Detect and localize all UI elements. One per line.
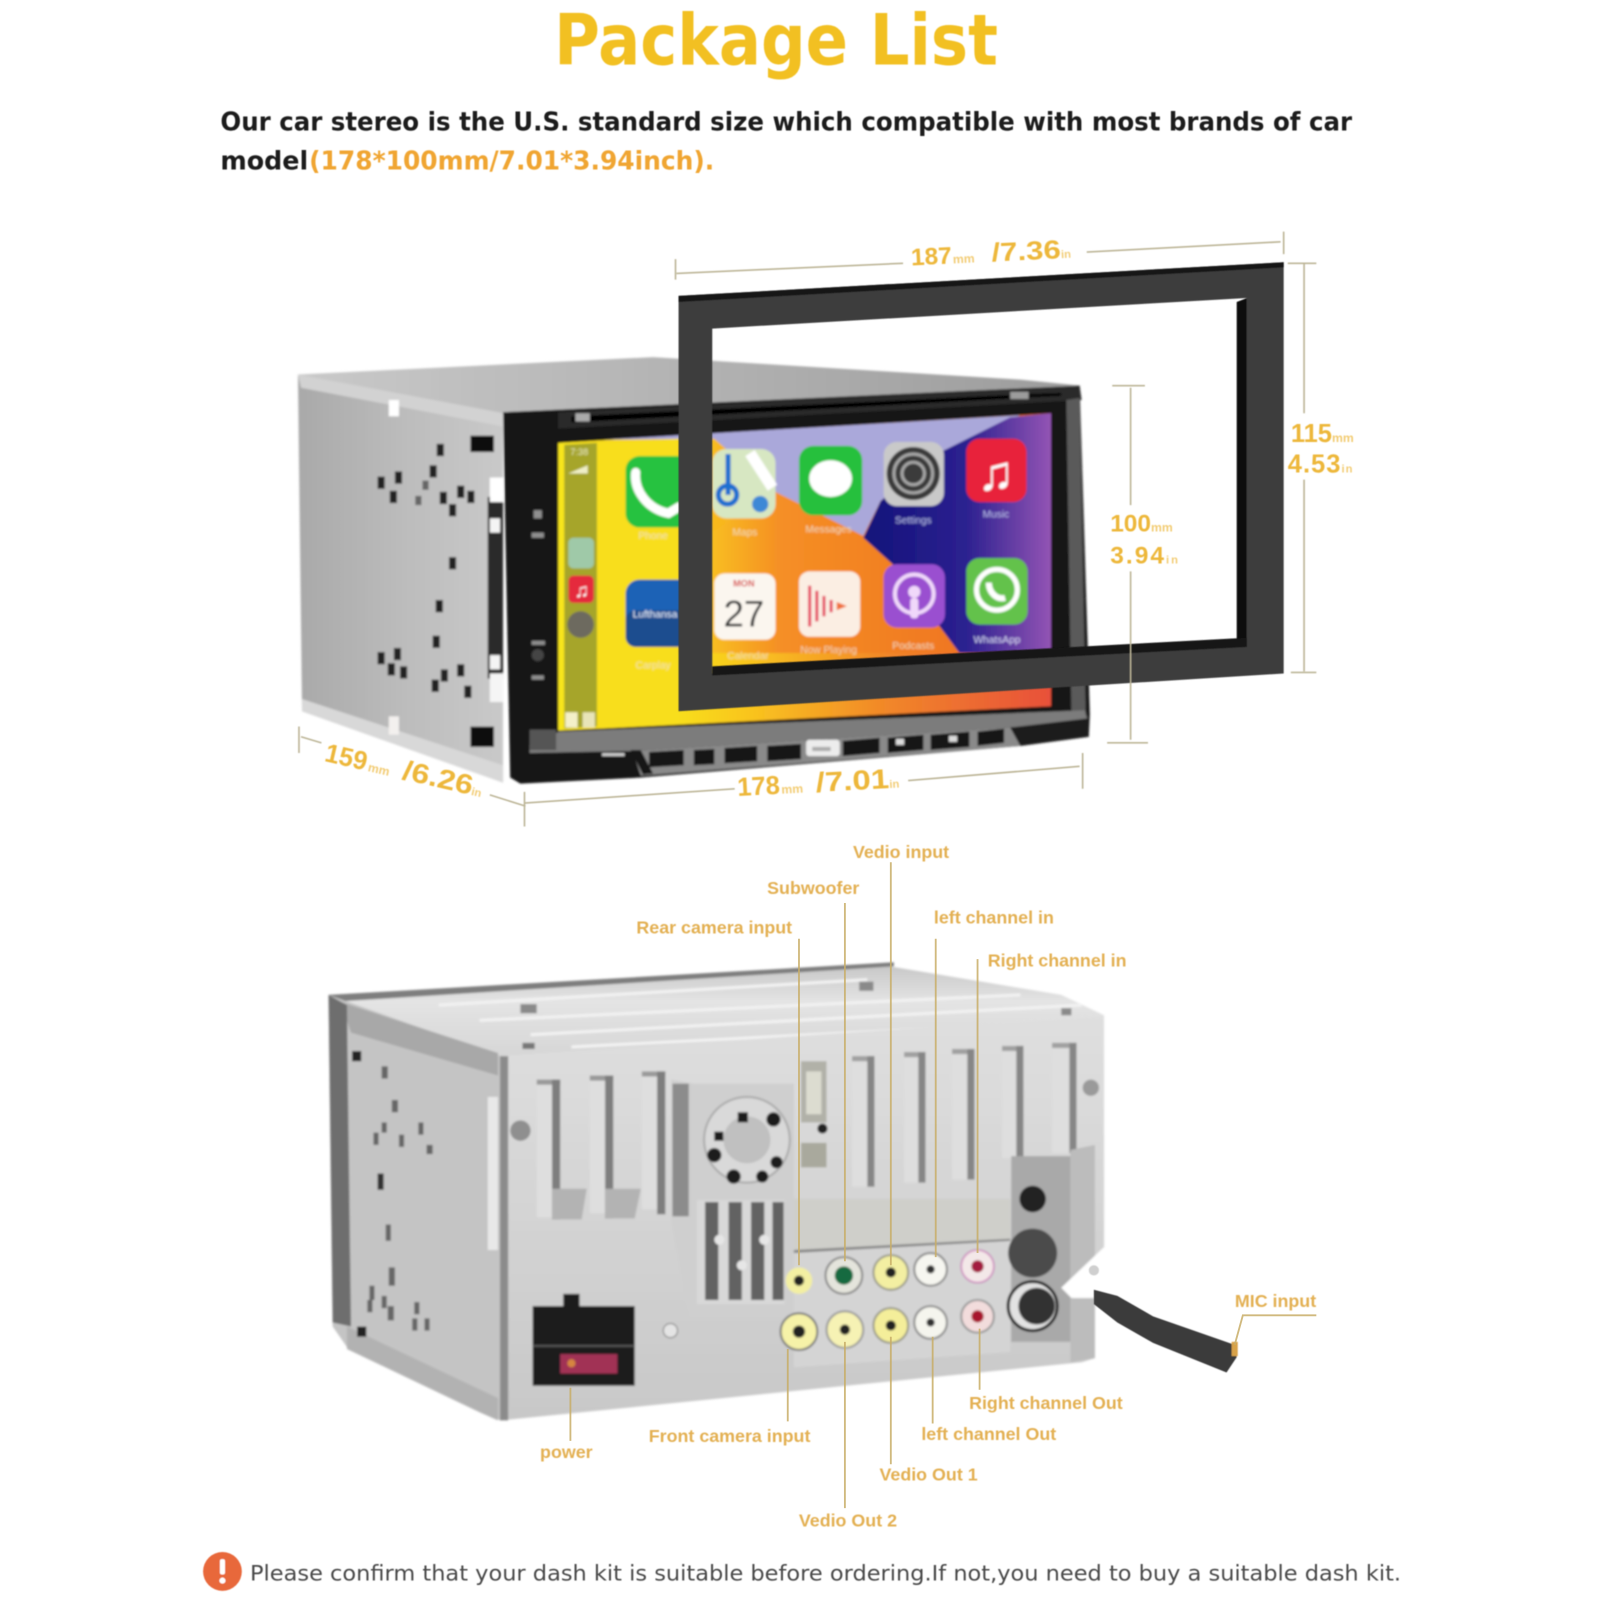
- screw heads: [510, 1080, 1099, 1338]
- app labels: Music: [983, 509, 1009, 520]
- connector labels: Vedio input: [853, 842, 949, 862]
- rca jacks top row: [786, 1250, 994, 1294]
- dimension: depth 159 mm: mm: [367, 761, 391, 779]
- icon: messages: [799, 446, 862, 515]
- dimension: width 178 mm: /7.01: [815, 763, 890, 798]
- intro text: (178*100mm/7.01*3.94inch).: [309, 146, 714, 176]
- app labels: WhatsApp: [973, 635, 1021, 646]
- dimension: width 187 mm: [910, 236, 1072, 271]
- connector labels: power: [540, 1442, 593, 1462]
- icon: calendar: MON: [733, 579, 755, 589]
- app labels: Maps: [732, 528, 757, 539]
- connector labels: left channel Out: [921, 1424, 1056, 1444]
- dimension: depth 159 mm: [322, 737, 486, 803]
- rear top face: [329, 962, 1104, 1057]
- vent slots: [537, 1043, 1077, 1219]
- fan panel: [671, 1080, 794, 1318]
- icon: calendar: [714, 573, 776, 640]
- connector labels: left channel in: [934, 907, 1054, 927]
- icon: phone: [626, 456, 697, 528]
- rear back face: [500, 1015, 1104, 1420]
- dimension: width 187 mm: 187: [910, 242, 952, 271]
- dash kit frame: [679, 262, 1284, 711]
- leader lines: [570, 862, 1316, 1508]
- dimension: width 178 mm: mm: [781, 781, 804, 797]
- carplay screen: Lufthansa: [633, 609, 678, 620]
- connector labels: Subwoofer: [767, 878, 859, 898]
- dimension: height 100 mm: 100mm: [1110, 511, 1173, 538]
- connector labels: Right channel in: [988, 950, 1127, 970]
- button bar: [530, 710, 1089, 782]
- rca jacks bottom row: [781, 1300, 994, 1350]
- dimension: height 115 mm: [1288, 420, 1354, 478]
- icon: whatsapp: [966, 558, 1028, 624]
- connector labels: Rear camera input: [636, 918, 792, 938]
- dimension: height 115 mm: 4.53in: [1288, 450, 1353, 478]
- app labels: Messages: [805, 525, 852, 536]
- dimension: depth 159 mm: /6.26: [400, 755, 476, 801]
- icon: settings: [884, 442, 944, 506]
- icon: now playing: [799, 571, 860, 637]
- app labels: Now Playing: [800, 645, 857, 656]
- warning icon: [203, 1552, 242, 1591]
- icon: music: ♫: [978, 447, 1014, 501]
- dimension: depth 159 mm: 159: [322, 740, 370, 777]
- dimension: width 187 mm: in: [1061, 248, 1071, 261]
- footnote: Please confirm that your dash kit is suitable before ordering.If not,you need to buy a suitable dash kit.: [250, 1562, 1401, 1587]
- wallpaper lavender: [602, 415, 1020, 536]
- knobs: [1007, 1186, 1058, 1332]
- intro text: [220, 108, 1352, 176]
- carplay screen: [558, 413, 1051, 731]
- app labels: Podcasts: [892, 641, 934, 652]
- icon: music: [966, 439, 1027, 502]
- rear side panel: [329, 995, 500, 1420]
- disc slot: [571, 393, 1061, 422]
- intro text: Our car stereo is the U.S. standard size which compatible with most brands of car: [220, 108, 1352, 138]
- jack plate: [794, 1145, 1108, 1367]
- dimension: width 178 mm: in: [889, 778, 900, 791]
- carplay screen: ♫: [574, 580, 589, 602]
- dimension lines: [299, 232, 1316, 827]
- stereo rear view: [329, 962, 1108, 1420]
- wallpaper lower band: [597, 653, 1051, 729]
- app labels: Settings: [895, 515, 932, 526]
- dimension: width 178 mm: [736, 762, 900, 802]
- connector labels: Vedio Out 1: [879, 1465, 978, 1485]
- connector labels: Vedio Out 2: [799, 1511, 897, 1531]
- app labels: Phone: [638, 531, 668, 542]
- app labels: Calendar: [727, 651, 769, 662]
- dimension: width 178 mm: 178: [737, 772, 781, 802]
- dimension: height 100 mm: [1110, 511, 1180, 569]
- connector labels: [540, 842, 1316, 1531]
- dimension: depth 159 mm: in: [470, 786, 483, 800]
- dock: [564, 443, 597, 729]
- connector labels: MIC input: [1235, 1291, 1316, 1311]
- icon: calendar: 27: [723, 594, 764, 635]
- power connector: [533, 1294, 635, 1386]
- icon: maps: [712, 449, 776, 518]
- carplay screen: 7:38: [570, 447, 588, 457]
- panel switches: [801, 1061, 828, 1167]
- dimension: width 187 mm: mm: [953, 251, 975, 266]
- intro text: model: [220, 146, 308, 176]
- connector labels: Front camera input: [649, 1426, 810, 1446]
- stereo side panel: [298, 374, 503, 783]
- app labels: [636, 509, 1021, 671]
- mic input cable: [1089, 1265, 1238, 1372]
- icon: podcasts: [884, 564, 945, 628]
- control strip: [532, 510, 545, 680]
- icon: app tile: [626, 580, 697, 647]
- wallpaper navy: [863, 413, 1051, 654]
- app labels: Carplay: [636, 660, 672, 671]
- stereo front bezel: [503, 386, 1090, 784]
- dimension: width 187 mm: /7.36: [991, 236, 1061, 267]
- dimension: height 115 mm: 115mm: [1291, 420, 1354, 448]
- stereo top face: [298, 357, 1082, 413]
- dimension: height 100 mm: 3.94in: [1110, 542, 1180, 569]
- title: Package List: [554, 0, 998, 81]
- stereo front view: [298, 357, 1090, 784]
- connector labels: Right channel Out: [969, 1393, 1123, 1413]
